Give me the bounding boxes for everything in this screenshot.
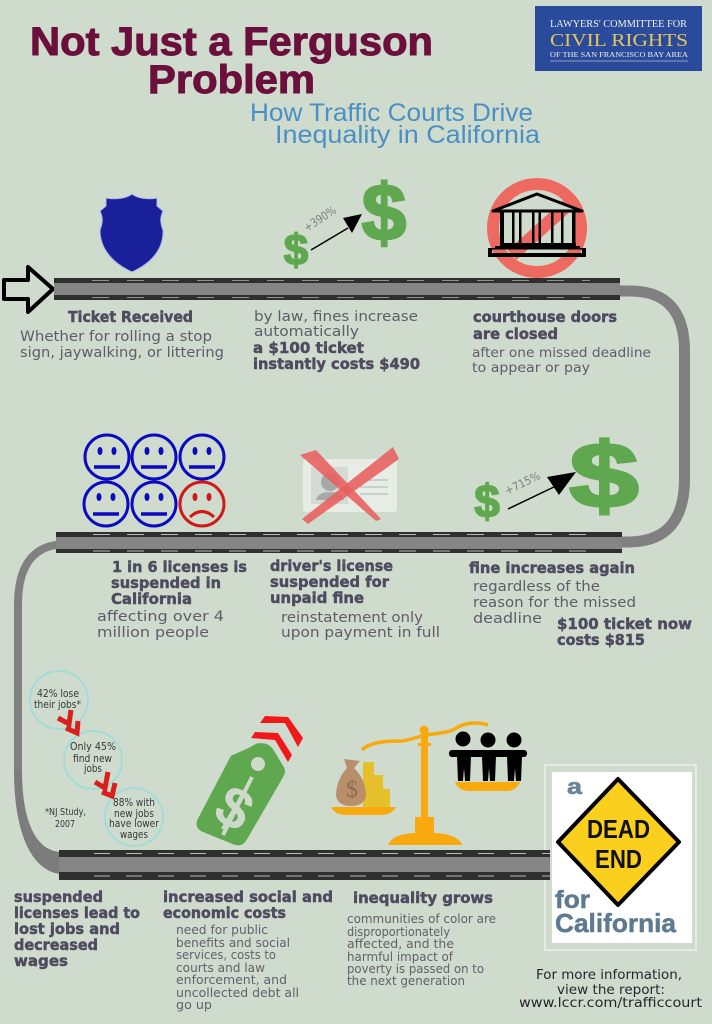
subtitle bbox=[250, 99, 540, 149]
text: inequality grows: poverty is passed on to bbox=[347, 962, 484, 976]
text: one in six licenses: affecting over 4 bbox=[97, 609, 224, 625]
text: one in six licenses bbox=[97, 558, 247, 641]
text: more information: For more information, bbox=[536, 967, 682, 983]
text: more information: www.lccr.com/trafficcourt bbox=[519, 995, 702, 1011]
text: courthouse doors closed bbox=[472, 308, 651, 376]
text: increased social and economic costs bbox=[163, 888, 333, 1012]
text: increased social and economic costs: go up bbox=[176, 998, 212, 1012]
road 2 bbox=[56, 532, 622, 553]
text: ticket received: sign, jaywalking, or littering bbox=[20, 345, 224, 361]
text: fine increases again: fine increases again bbox=[469, 559, 635, 577]
icon: road sign: DEAD bbox=[587, 814, 650, 844]
text: driver's license suspended: suspended for bbox=[270, 573, 389, 591]
text: ticket received: Whether for rolling a stop bbox=[20, 329, 212, 345]
title: Not Just a Ferguson bbox=[30, 20, 433, 64]
text: fine increases again: costs $815 bbox=[557, 631, 645, 649]
stat circle: 45 percent: find new bbox=[73, 753, 112, 765]
text: ticket received bbox=[20, 308, 224, 361]
icon: price tag: $ bbox=[204, 772, 264, 845]
text: fines increase: automatically bbox=[254, 324, 359, 340]
text: inequality grows: the next generation bbox=[347, 974, 465, 988]
text: suspended licenses lead to lost jobs: suspended bbox=[14, 888, 103, 906]
panel caption bbox=[555, 774, 677, 938]
panel caption: for bbox=[555, 886, 590, 914]
icon: courthouse closed bbox=[488, 184, 586, 272]
text: driver's license suspended: reinstatement only bbox=[281, 610, 423, 626]
footnote: 2007 bbox=[55, 819, 75, 830]
text: increased social and economic costs: services, costs to bbox=[176, 948, 276, 962]
text: fine increases again: $100 ticket now bbox=[557, 615, 692, 633]
stat circle: 88 percent: new jobs bbox=[114, 808, 154, 820]
stat circle: 42 percent: 42% lose bbox=[37, 688, 79, 700]
text: suspended licenses lead to lost jobs: licenses lead to bbox=[14, 904, 140, 922]
icon: fines rise 390 percent bbox=[284, 168, 406, 275]
text: increased social and economic costs: enforcement, and bbox=[176, 973, 287, 987]
icon: crossed-out driver's license bbox=[300, 447, 399, 524]
text: increased social and economic costs: uncollected debt all bbox=[176, 986, 299, 1000]
text: suspended licenses lead to lost jobs bbox=[14, 888, 140, 970]
icon: fines rise 715 percent: $ bbox=[569, 425, 639, 527]
icon: fines rise 390 percent: $ bbox=[362, 168, 406, 257]
icon: fines rise 715 percent: $ bbox=[474, 475, 500, 527]
panel caption: California bbox=[555, 908, 677, 938]
scale stand bbox=[331, 723, 520, 845]
stat circle: 88 percent: have lower bbox=[109, 818, 160, 830]
text: one in six licenses: California bbox=[111, 590, 192, 608]
logo: Lawyers' Committee for Civil Rights: LAWYERS' COMMITTEE FOR bbox=[550, 19, 687, 30]
footnote bbox=[45, 807, 86, 830]
money bag and coins: $ bbox=[346, 777, 358, 803]
stat circle: 88 percent: wages bbox=[120, 829, 148, 841]
icon: scale of inequality bbox=[331, 723, 527, 845]
text: inequality grows: communities of color are bbox=[347, 912, 496, 926]
subtitle: Inequality in California bbox=[275, 121, 540, 149]
text: fines increase: by law, fines increase bbox=[254, 309, 418, 325]
icon: price tag bbox=[198, 716, 303, 845]
text: one in six licenses: million people bbox=[97, 625, 209, 641]
text: fine increases again: deadline bbox=[473, 611, 542, 627]
stat circle: 45 percent: jobs bbox=[83, 763, 102, 775]
logo: Lawyers' Committee for Civil Rights bbox=[535, 6, 702, 71]
stat circle: 42 percent: their jobs* bbox=[34, 699, 81, 711]
text: courthouse doors closed: to appear or pay bbox=[472, 360, 590, 376]
icon: road sign bbox=[558, 779, 679, 905]
panel caption: a bbox=[567, 774, 583, 799]
subtitle: How Traffic Courts Drive bbox=[250, 99, 533, 127]
text: inequality grows: disproportionately bbox=[347, 925, 450, 939]
text: more information: view the report: bbox=[557, 982, 665, 998]
text: inequality grows bbox=[347, 889, 496, 988]
text: driver's license suspended bbox=[270, 557, 440, 641]
text: fine increases again bbox=[469, 559, 692, 649]
start arrow bbox=[4, 267, 53, 312]
logo: Lawyers' Committee for Civil Rights: OF THE SAN FRANCISCO BAY AREA bbox=[550, 50, 689, 59]
icon: fines rise 390 percent: +390% bbox=[301, 203, 339, 235]
text: courthouse doors closed: courthouse doors bbox=[473, 308, 617, 326]
people group bbox=[449, 732, 527, 781]
stat circle: 88 percent bbox=[105, 788, 163, 846]
text: driver's license suspended: upon payment in full bbox=[281, 625, 440, 641]
stat circle: 45 percent bbox=[64, 731, 122, 789]
icon: fines rise 390 percent: $ bbox=[284, 226, 308, 275]
road 3 bbox=[59, 850, 550, 880]
text: suspended licenses lead to lost jobs: lost jobs and bbox=[14, 920, 120, 938]
text: increased social and economic costs: economic costs bbox=[163, 904, 286, 922]
title bbox=[30, 20, 433, 102]
money bag and coins bbox=[336, 759, 390, 807]
icon: six faces, one in six suspended bbox=[84, 435, 224, 526]
text: suspended licenses lead to lost jobs: decreased bbox=[14, 936, 98, 954]
text: increased social and economic costs: courts and law bbox=[176, 961, 265, 975]
text: fines increase: instantly costs $490 bbox=[253, 355, 420, 373]
text: driver's license suspended: driver's license bbox=[270, 557, 393, 575]
text: fine increases again: reason for the missed bbox=[473, 595, 636, 611]
text: courthouse doors closed: after one missed deadline bbox=[472, 345, 651, 361]
text: courthouse doors closed: are closed bbox=[473, 325, 558, 343]
icon: road sign: END bbox=[595, 844, 642, 874]
stat circle: 88 percent: 88% with bbox=[113, 797, 155, 809]
text: increased social and economic costs: need for public bbox=[176, 923, 268, 937]
icon: police badge bbox=[100, 194, 163, 272]
road 1 bbox=[54, 278, 620, 300]
stat circle: 42 percent bbox=[30, 671, 88, 729]
text: ticket received: Ticket Received bbox=[68, 308, 193, 326]
connector curve: top right bbox=[620, 291, 684, 542]
icon: fines rise 715 percent bbox=[474, 425, 639, 527]
text: inequality grows: affected, and the bbox=[347, 937, 454, 951]
text: fine increases again: regardless of the bbox=[473, 579, 600, 595]
text: fines increase: a $100 ticket bbox=[253, 339, 365, 357]
title: Problem bbox=[148, 58, 315, 102]
footnote: *NJ Study, bbox=[45, 807, 86, 818]
text: increased social and economic costs: benefits and social bbox=[176, 936, 290, 950]
text: inequality grows: inequality grows bbox=[353, 889, 493, 907]
text: one in six licenses: suspended in bbox=[111, 574, 221, 592]
panel: dead end sign bbox=[552, 772, 692, 943]
connector curve: bottom left bend bbox=[14, 770, 60, 874]
icon: fines rise 715 percent: +715% bbox=[502, 468, 543, 498]
connector curve: left side bbox=[18, 544, 60, 772]
logo: Lawyers' Committee for Civil Rights: CIVIL RIGHTS bbox=[550, 30, 688, 50]
text: fines increase bbox=[253, 309, 420, 373]
text: increased social and economic costs: increased social and bbox=[163, 888, 333, 906]
chevrons between stats bbox=[58, 710, 115, 796]
text: one in six licenses: 1 in 6 licenses is bbox=[112, 558, 247, 576]
text: inequality grows: harmful impact of bbox=[347, 950, 454, 964]
job loss statistics chain bbox=[30, 671, 163, 846]
text: more information bbox=[519, 967, 702, 1011]
text: suspended licenses lead to lost jobs: wages bbox=[14, 952, 68, 970]
text: driver's license suspended: unpaid fine bbox=[270, 589, 364, 607]
stat circle: 45 percent: Only 45% bbox=[70, 741, 116, 753]
